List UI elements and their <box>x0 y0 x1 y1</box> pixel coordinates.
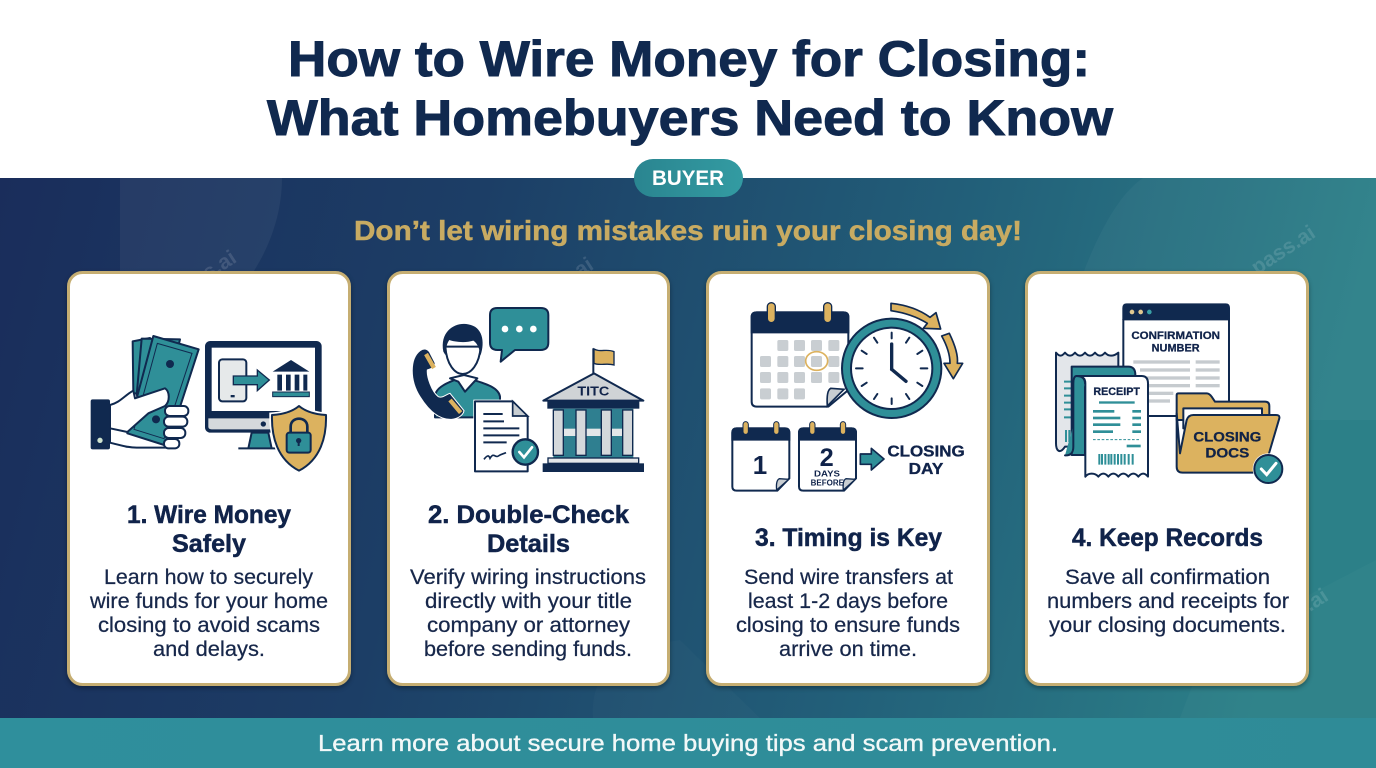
body text <box>410 566 646 661</box>
icon: call and title company: TITC <box>577 385 609 399</box>
body text: and delays. <box>153 638 265 661</box>
icon: records and documents: CLOSING <box>1193 430 1261 445</box>
body text <box>1047 566 1289 637</box>
gradient band: .ai <box>1300 584 1332 616</box>
icon: call and title company <box>412 308 644 472</box>
gradient band: pass.ai <box>1247 221 1319 279</box>
icon: calendar and clock: CLOSING <box>887 444 965 461</box>
body text: least 1-2 days before <box>748 590 948 613</box>
icon: calendar and clock: 2 <box>820 444 834 472</box>
tagline: Don’t let wiring mistakes ruin your closing day! <box>354 215 1022 246</box>
gradient band: pass.ai <box>168 246 240 304</box>
badge: buyer: BUYER <box>652 167 724 190</box>
icon: records and documents <box>1056 303 1284 485</box>
heading: 2. Double-Check <box>428 501 629 529</box>
heading <box>127 501 291 558</box>
body text: directly with your title <box>425 590 632 613</box>
title: What Homebuyers Need to Know <box>267 90 1113 146</box>
heading <box>428 501 629 558</box>
body text: Learn how to securely <box>104 566 314 589</box>
icon: calendar and clock <box>731 303 965 491</box>
panel: step 3 <box>708 272 988 684</box>
body text: numbers and receipts for <box>1047 590 1289 613</box>
heading: Safely <box>172 530 246 558</box>
footer bar <box>0 718 1376 768</box>
panel: step 2 <box>388 272 668 684</box>
gradient band <box>0 178 1376 718</box>
icon: cash and secure transfer <box>91 336 329 474</box>
body text: closing to avoid scams <box>98 614 320 637</box>
title: How to Wire Money for Closing: <box>288 31 1090 87</box>
icon: calendar and clock: DAYS <box>814 469 841 478</box>
body text: company or attorney <box>427 614 631 637</box>
body text: wire funds for your home <box>89 590 328 613</box>
heading: Details <box>487 530 570 558</box>
title <box>267 31 1113 146</box>
body text: arrive on time. <box>779 638 917 661</box>
heading: 4. Keep Records <box>1072 524 1263 552</box>
icon: records and documents: RECEIPT <box>1093 386 1140 398</box>
heading: 1. Wire Money <box>127 501 291 529</box>
panel: step 4 <box>1026 272 1308 684</box>
icon: calendar and clock: BEFORE <box>811 479 845 488</box>
body text: before sending funds. <box>424 638 632 661</box>
body text: closing to ensure funds <box>736 614 960 637</box>
body text <box>736 566 960 661</box>
body text: your closing documents. <box>1049 614 1286 637</box>
icon: records and documents: NUMBER <box>1152 342 1200 354</box>
gradient band: pass.ai <box>525 253 597 311</box>
page background <box>0 0 1376 178</box>
icon: records and documents: CONFIRMATION <box>1131 330 1220 342</box>
icon: calendar and clock: DAY <box>909 461 944 478</box>
body text: Save all confirmation <box>1065 566 1270 589</box>
footer bar: Learn more about secure home buying tips and scam prevention. <box>318 730 1058 756</box>
body text <box>89 566 328 661</box>
icon: calendar and clock: 1 <box>753 450 767 480</box>
badge: buyer <box>634 159 743 197</box>
icon: records and documents: DOCS <box>1205 446 1249 461</box>
heading: 3. Timing is Key <box>755 524 942 552</box>
body text: Verify wiring instructions <box>410 566 646 589</box>
panel: step 1 <box>68 272 350 684</box>
body text: Send wire transfers at <box>744 566 953 589</box>
